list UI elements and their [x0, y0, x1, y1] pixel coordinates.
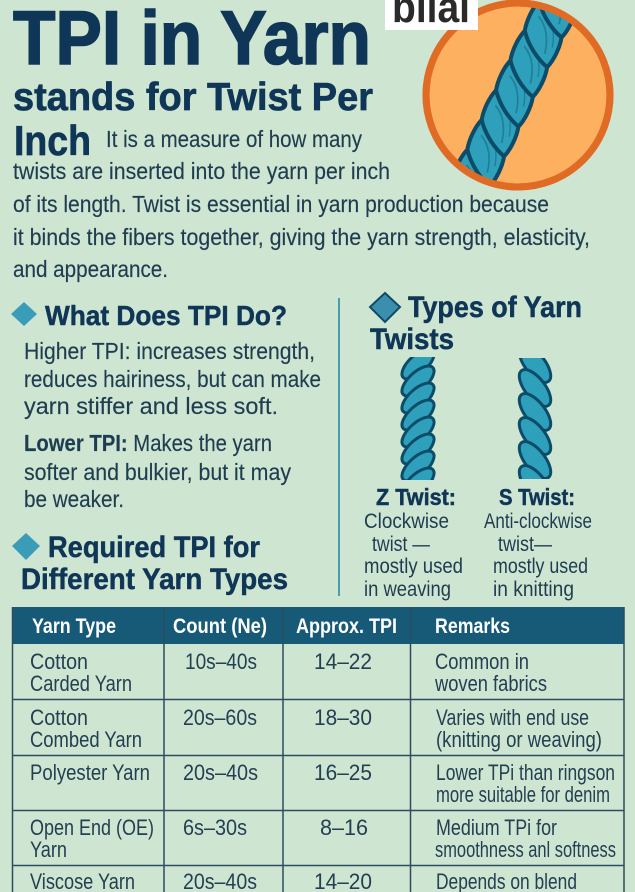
S twist description: twist— — [498, 533, 552, 556]
row: cotton combed yarn: Varies with end use — [436, 705, 589, 730]
Z twist description: twist — — [372, 533, 430, 556]
text block: what TPI does: softer and bulkier, but it may — [24, 459, 291, 485]
text block: what TPI does: be weaker. — [24, 486, 124, 512]
text block: what TPI does — [24, 338, 321, 512]
text block: what TPI does: yarn stiffer and less soft. — [24, 393, 278, 419]
row: open end yarn: 6s–30s — [183, 815, 247, 840]
intro text block: and appearance. — [13, 256, 168, 282]
row: polyester yarn: 20s–40s — [183, 760, 258, 785]
row: cotton combed yarn: Cotton — [30, 705, 88, 730]
heading: Required TPI — [12, 531, 288, 596]
table header: Yarn Type — [32, 615, 116, 638]
table header — [12, 607, 624, 644]
row: polyester yarn: 16–25 — [314, 760, 372, 785]
row: cotton carded yarn: Carded Yarn — [30, 671, 132, 696]
row: cotton carded yarn: 10s–40s — [185, 649, 257, 674]
table header: Count (Ne) — [173, 615, 267, 638]
S twist description: Anti-clockwise — [484, 510, 592, 533]
subtitle line: stands for Twist Per — [13, 76, 373, 119]
table header: Approx. TPI — [296, 615, 397, 638]
row: open end yarn: 8–16 — [320, 815, 368, 840]
heading: Types of Yarn Twists — [370, 291, 582, 356]
row: cotton combed yarn: (knitting or weaving) — [436, 727, 602, 752]
row: polyester yarn — [30, 760, 615, 807]
icon: yarn rope in orange circle — [426, 0, 610, 217]
row: cotton combed yarn: 18–30 — [314, 705, 372, 730]
row: cotton carded yarn: Common in — [435, 649, 529, 674]
heading: Types of Yarn Twists: Types of Yarn — [408, 291, 582, 324]
heading: Required TPI: Required TPI for — [48, 531, 260, 564]
row: cotton combed yarn: 20s–60s — [183, 705, 257, 730]
Z twist description: in weaving — [364, 578, 451, 601]
Z twist description: mostly used — [364, 555, 463, 578]
table: required TPI by yarn type — [12, 607, 624, 892]
Z twist description: Clockwise — [364, 510, 449, 533]
row: viscose yarn — [30, 869, 577, 892]
row: cotton carded yarn: woven fabrics — [434, 671, 547, 696]
intro text block: It is a measure of how many — [106, 126, 362, 152]
Z twist description: Z Twist: — [376, 484, 456, 510]
text block: what TPI does: Lower TPI: Makes the yarn — [24, 430, 272, 456]
intro text block: twists are inserted into the yarn per inch — [13, 158, 390, 184]
heading: Required TPI: Different Yarn Types — [21, 563, 288, 596]
row: cotton carded yarn — [30, 649, 547, 696]
text block: what TPI does: Higher TPI: increases strength, — [24, 338, 315, 364]
heading: Types of Yarn Twists: Twists — [370, 323, 454, 356]
S twist description: S Twist: — [499, 484, 575, 510]
Z twist description — [364, 484, 463, 601]
intro text block: of its length. Twist is essential in yarn production because — [13, 191, 549, 217]
row: polyester yarn: Polyester Yarn — [30, 760, 150, 785]
table header: Remarks — [435, 615, 510, 638]
intro text block — [13, 126, 590, 282]
row: open end yarn — [30, 815, 616, 862]
row: open end yarn: Yarn — [30, 837, 67, 862]
row: open end yarn: Medium TPi for — [436, 815, 557, 840]
subtitle word: Inch: Inch — [14, 117, 91, 164]
row: cotton combed yarn — [30, 705, 602, 752]
S twist description: in knitting — [493, 578, 574, 601]
intro text block: it binds the fibers together, giving the yarn strength, elasticity, — [13, 224, 590, 250]
row: cotton combed yarn: Combed Yarn — [30, 727, 142, 752]
icon: Z twist yarn — [400, 357, 436, 480]
row: cotton carded yarn: 14–22 — [314, 649, 372, 674]
row: cotton carded yarn: Cotton — [30, 649, 88, 674]
S twist description — [484, 484, 592, 601]
icon: S twist yarn — [518, 358, 552, 479]
S twist description: mostly used — [493, 555, 588, 578]
heading: What Does TPI Do?: What Does TPI Do? — [45, 300, 287, 331]
text block: what TPI does: reduces hairiness, but can make — [24, 366, 321, 392]
row: open end yarn: Open End (OE) — [30, 815, 154, 840]
